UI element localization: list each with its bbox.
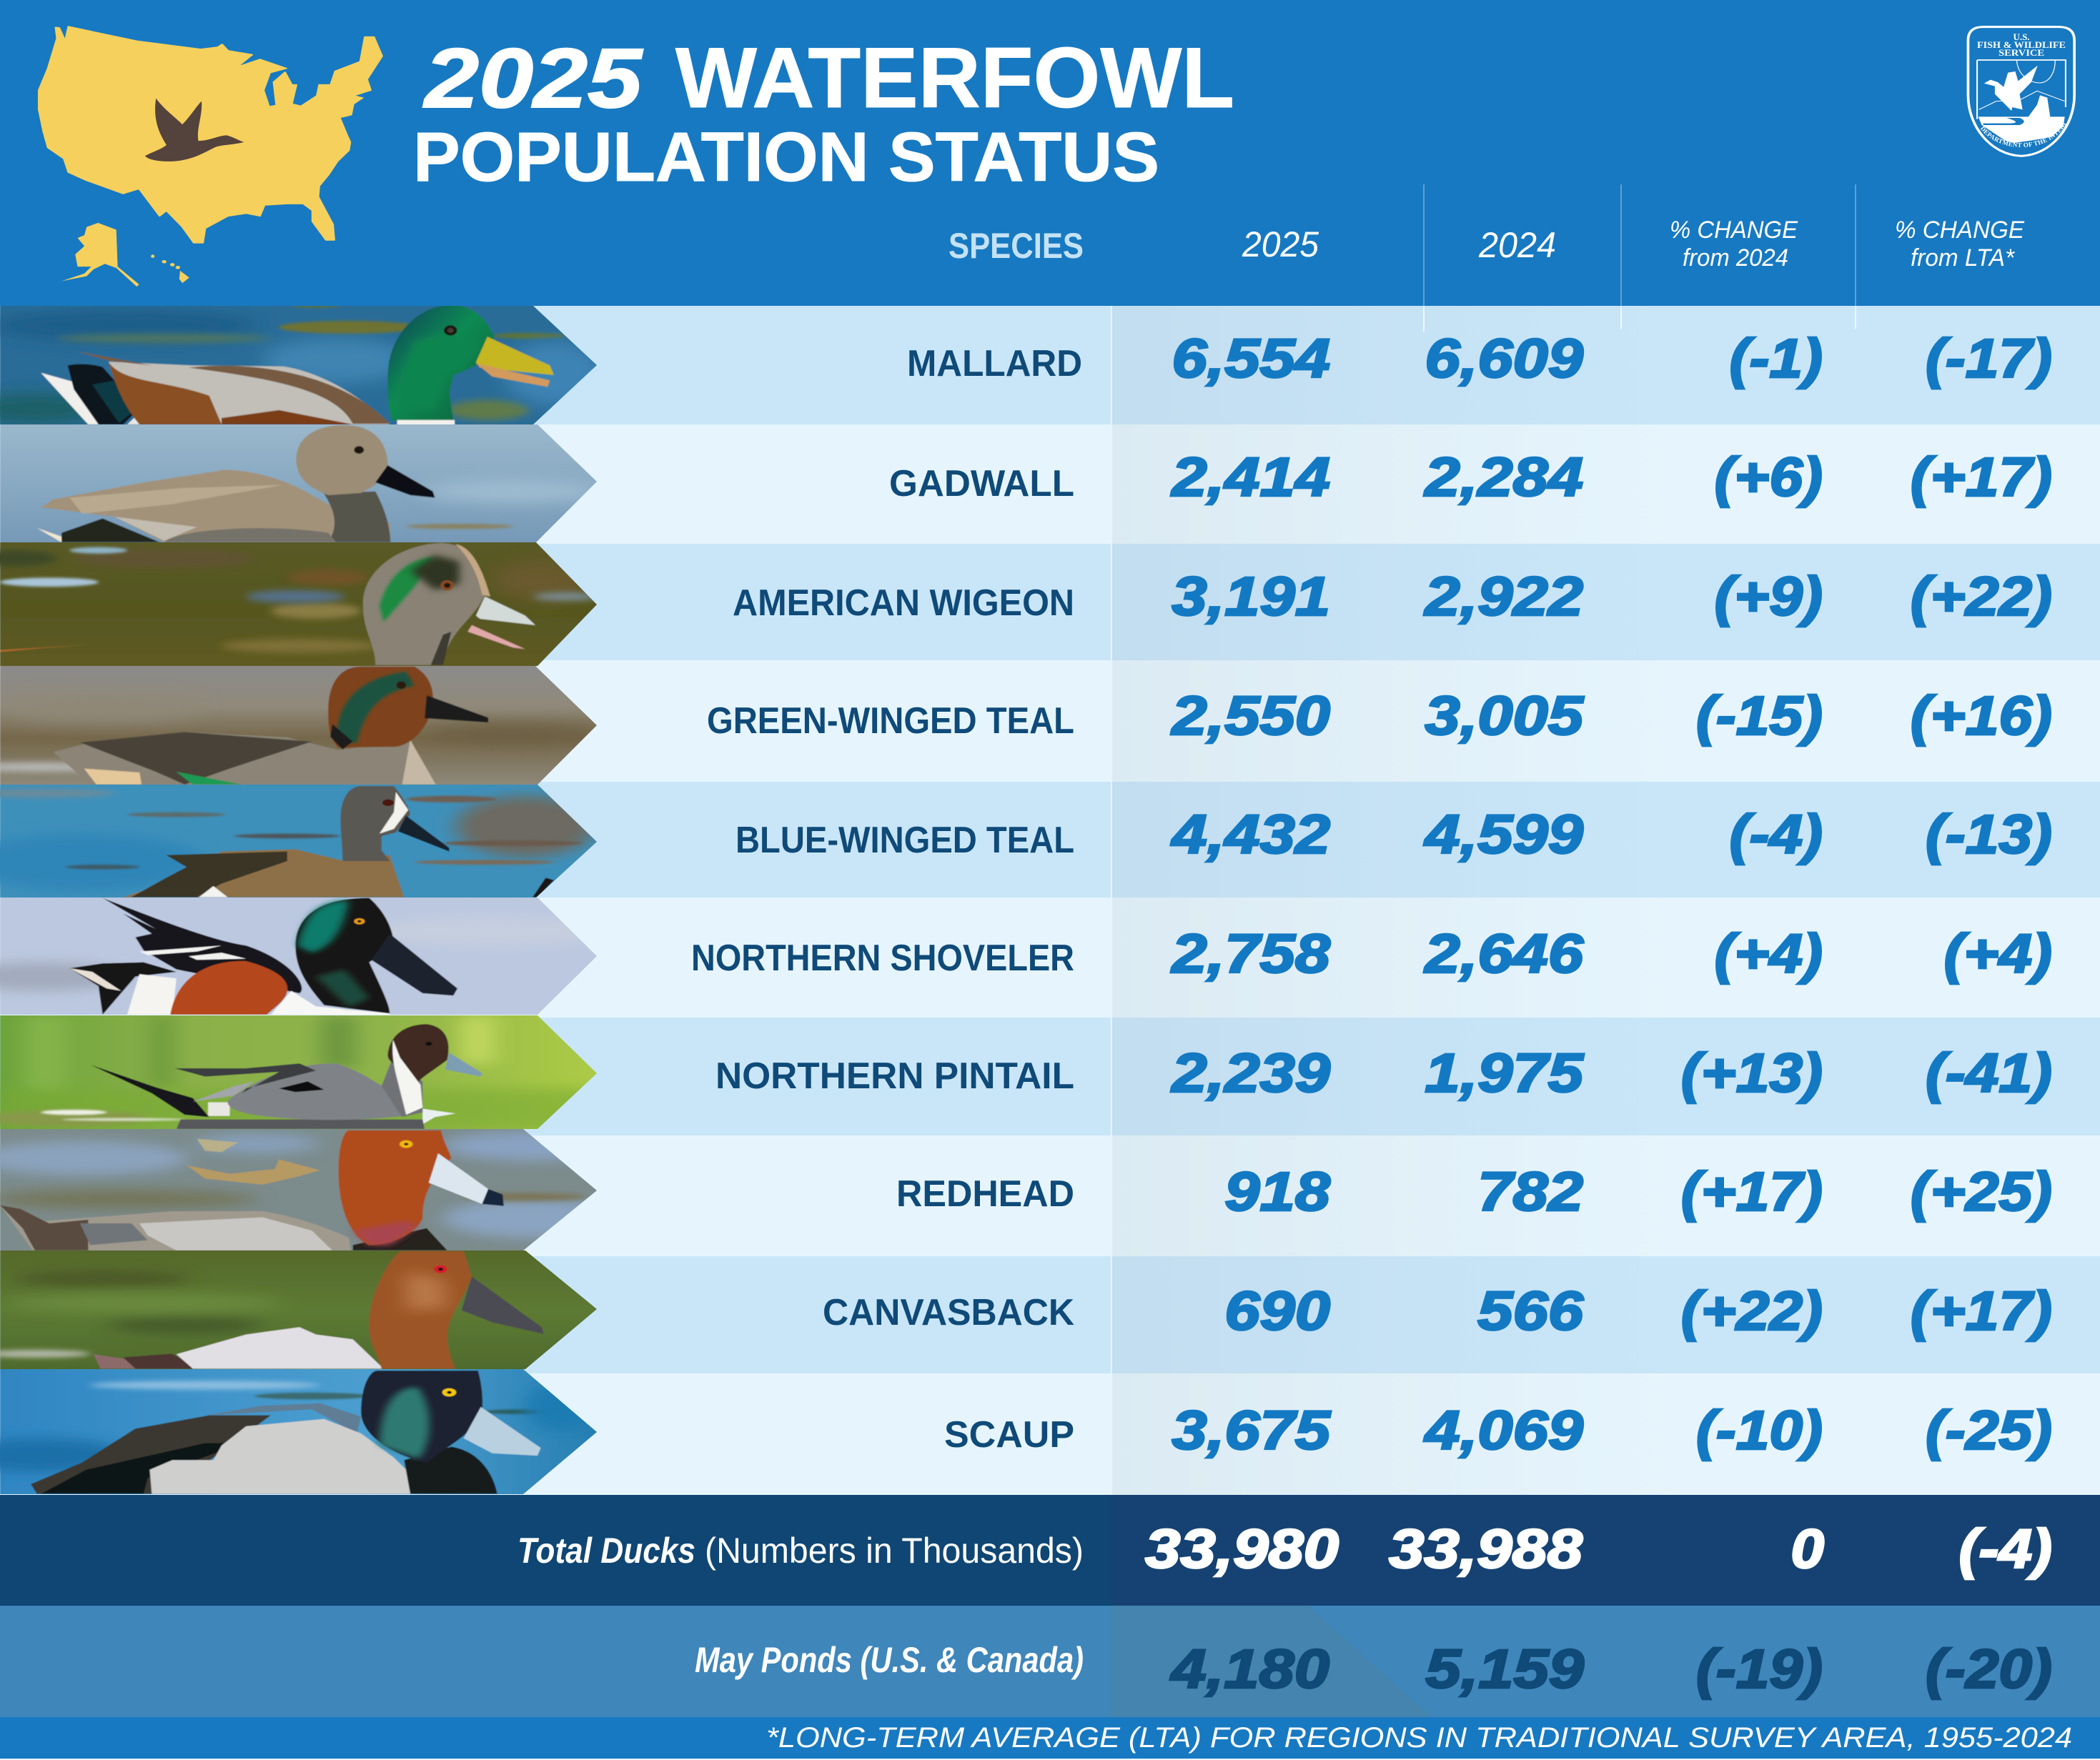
data column: 2024: 2,284 xyxy=(1423,446,1583,508)
column headers: % CHANGE xyxy=(1670,217,1798,244)
title xyxy=(413,30,1234,196)
duck photo: green-winged teal xyxy=(0,666,597,785)
title: 2025 xyxy=(423,31,644,126)
logo: U.S. Fish and Wildlife Service shield: SERVICE xyxy=(1999,47,2044,58)
data column: 2024: 566 xyxy=(1477,1280,1584,1342)
total ducks row: 33,988 xyxy=(1389,1518,1583,1580)
duck photo: gadwall xyxy=(0,424,597,542)
total ducks row: (Numbers in Thousands) xyxy=(705,1531,1084,1571)
data column: percent change from LTA: (-17) xyxy=(1926,328,2052,389)
data column: 2024: 4,069 xyxy=(1423,1399,1583,1461)
total ducks row: Total Ducks xyxy=(517,1531,695,1571)
map: United States with duck silhouette xyxy=(39,26,382,287)
table bands xyxy=(0,184,2100,1495)
data column: 2025: 2,758 xyxy=(1170,923,1331,985)
data column: percent change from LTA: (-25) xyxy=(1926,1400,2052,1461)
data column: 2025: 918 xyxy=(1224,1160,1331,1223)
duck photo: northern shoveler xyxy=(0,898,597,1015)
logo: U.S. Fish and Wildlife Service shield: U.S. xyxy=(2013,31,2030,42)
data column: percent change from 2024: (+13) xyxy=(1681,1043,1823,1104)
May ponds row: (-19) xyxy=(1696,1639,1823,1700)
data column: percent change from 2024: (-4) xyxy=(1730,804,1823,865)
data column: percent change from 2024: (+17) xyxy=(1681,1161,1823,1223)
May ponds row: (-20) xyxy=(1926,1639,2052,1700)
column headers: from 2024 xyxy=(1683,244,1788,272)
data column: percent change from LTA: (+25) xyxy=(1911,1161,2052,1223)
logo: U.S. Fish and Wildlife Service shield xyxy=(1967,26,2076,157)
May ponds row: May Ponds (U.S. & Canada) xyxy=(695,1640,1084,1680)
May ponds row xyxy=(0,1606,2100,1717)
species names: NORTHERN SHOVELER xyxy=(691,938,1074,979)
title: POPULATION STATUS xyxy=(413,118,1159,196)
data column: percent change from LTA: (+16) xyxy=(1911,685,2052,747)
title: WATERFOWL xyxy=(675,30,1234,126)
data column: 2025: 3,191 xyxy=(1172,565,1330,627)
logo: U.S. Fish and Wildlife Service shield: FISH & WILDLIFE xyxy=(1977,39,2066,50)
species names: SCAUP xyxy=(944,1414,1074,1456)
data column: percent change from 2024: (+6) xyxy=(1714,447,1823,508)
header background xyxy=(0,0,2100,307)
data column: percent change from LTA: (+4) xyxy=(1943,923,2052,985)
data column: percent change from LTA: (+22) xyxy=(1911,566,2052,627)
duck photo: canvasback xyxy=(0,1248,643,1371)
species names: REDHEAD xyxy=(896,1173,1074,1215)
total ducks row: (-4) xyxy=(1959,1518,2052,1580)
duck photo: blue-winged teal xyxy=(0,785,597,898)
column headers: % CHANGE xyxy=(1895,217,2024,244)
duck photo: scaup xyxy=(0,1368,643,1496)
data column: 2024: 2,922 xyxy=(1423,565,1583,627)
data column: percent change from 2024: (+4) xyxy=(1714,923,1823,985)
duck photo: redhead xyxy=(0,1128,643,1253)
data column: percent change from 2024: (-1) xyxy=(1730,328,1823,389)
data column: 2024: 3,005 xyxy=(1425,685,1585,747)
column headers: 2025 xyxy=(1242,224,1319,264)
data column: percent change from LTA: (+17) xyxy=(1911,1281,2052,1342)
data column: 2024 xyxy=(1423,327,1585,1461)
data column: 2024: 1,975 xyxy=(1425,1042,1585,1104)
data column: 2025 xyxy=(1170,327,1332,1461)
data column: 2025: 2,550 xyxy=(1170,685,1330,747)
species names: NORTHERN PINTAIL xyxy=(715,1055,1074,1097)
data column: 2024: 6,609 xyxy=(1425,327,1583,389)
species names: GADWALL xyxy=(889,463,1074,504)
data column: percent change from LTA xyxy=(1911,328,2052,1461)
data column: 2025: 2,414 xyxy=(1170,446,1330,508)
column headers xyxy=(949,217,2024,272)
data column: percent change from 2024: (-15) xyxy=(1696,685,1823,747)
data column: percent change from 2024: (+22) xyxy=(1681,1281,1823,1342)
footer note: *LONG-TERM AVERAGE (LTA) FOR REGIONS IN TRADITIONAL SURVEY AREA, 1955-2024 xyxy=(766,1722,2072,1754)
total ducks row: 33,980 xyxy=(1145,1518,1339,1580)
data column: 2024: 4,599 xyxy=(1423,803,1583,865)
data column: percent change from LTA: (-13) xyxy=(1926,804,2052,865)
data column: 2024: 782 xyxy=(1477,1160,1583,1223)
data column: percent change from 2024: (+9) xyxy=(1714,566,1823,627)
data column: percent change from LTA: (+17) xyxy=(1911,447,2052,508)
species names: GREEN-WINGED TEAL xyxy=(707,700,1074,742)
May ponds row: 5,159 xyxy=(1425,1638,1584,1700)
species names: AMERICAN WIGEON xyxy=(733,582,1074,624)
species names: CANVASBACK xyxy=(823,1292,1074,1333)
data column: 2025: 2,239 xyxy=(1170,1042,1330,1104)
species names: MALLARD xyxy=(907,343,1082,384)
data column: 2025: 3,675 xyxy=(1172,1399,1332,1461)
data column: percent change from LTA: (-41) xyxy=(1926,1043,2052,1104)
data column: 2025: 4,432 xyxy=(1170,803,1330,865)
species names xyxy=(691,343,1082,1456)
species names: BLUE-WINGED TEAL xyxy=(736,820,1074,861)
data column: 2025: 6,554 xyxy=(1172,327,1330,389)
duck photo: mallard xyxy=(0,306,597,424)
duck photo: northern pintail xyxy=(0,1015,643,1131)
footer note xyxy=(0,1717,2100,1760)
total ducks row xyxy=(0,1495,2100,1606)
column headers: SPECIES xyxy=(949,226,1084,266)
May ponds row: 4,180 xyxy=(1169,1638,1329,1700)
data column: percent change from 2024 xyxy=(1681,328,1823,1461)
column headers: from LTA* xyxy=(1911,244,2016,272)
total ducks row: 0 xyxy=(1791,1518,1824,1580)
data column: 2025: 690 xyxy=(1224,1280,1330,1342)
data column: 2024: 2,646 xyxy=(1423,923,1584,985)
duck photo: American wigeon xyxy=(0,542,597,666)
column headers: 2024 xyxy=(1478,225,1556,265)
data column: percent change from 2024: (-10) xyxy=(1696,1400,1823,1461)
